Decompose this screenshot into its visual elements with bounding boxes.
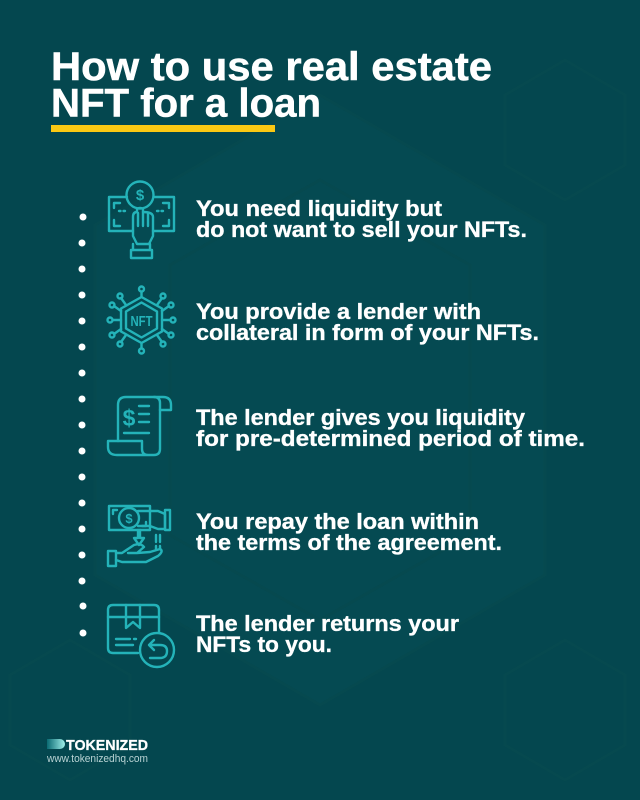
website url: www.tokenizedhq.com xyxy=(46,753,148,765)
title underline xyxy=(51,125,275,132)
icon: hand on banknote: $ xyxy=(136,187,145,204)
text: step 2: You provide a lender with xyxy=(196,299,481,324)
icon: NFT hexagon: NFT xyxy=(130,313,152,330)
title: NFT for a loan xyxy=(51,82,321,126)
text: step 3: for pre-determined period of time. xyxy=(196,426,585,451)
icon: contract scroll: $ xyxy=(123,405,136,431)
icon: loan repayment: $ xyxy=(125,511,133,526)
icon: loan repayment xyxy=(108,506,170,566)
logo mark xyxy=(47,739,65,749)
text: step 3: The lender gives you liquidity xyxy=(196,405,526,430)
icon: hand on banknote xyxy=(109,182,174,258)
text: step 4: You repay the loan within xyxy=(196,509,479,534)
text: step 2: collateral in form of your NFTs. xyxy=(196,320,539,345)
text: step 1 xyxy=(196,196,527,242)
icon: returned package xyxy=(108,605,174,667)
title xyxy=(51,45,492,126)
icon: contract scroll xyxy=(108,397,171,455)
text: step 5: The lender returns your xyxy=(196,611,459,636)
icon: NFT hexagon xyxy=(108,286,176,354)
text: step 4 xyxy=(196,509,502,555)
dotted timeline xyxy=(78,214,86,636)
text: step 4: the terms of the agreement. xyxy=(196,530,502,555)
text: step 5: NFTs to you. xyxy=(196,632,332,657)
text: step 3 xyxy=(196,405,585,451)
title: How to use real estate xyxy=(51,45,492,89)
text: step 2 xyxy=(196,299,539,345)
logo wordmark: TOKENIZED xyxy=(66,737,148,754)
logo xyxy=(47,739,65,749)
text: step 1: You need liquidity but xyxy=(196,196,443,221)
text: step 1: do not want to sell your NFTs. xyxy=(196,217,527,242)
text: step 5 xyxy=(196,611,459,657)
